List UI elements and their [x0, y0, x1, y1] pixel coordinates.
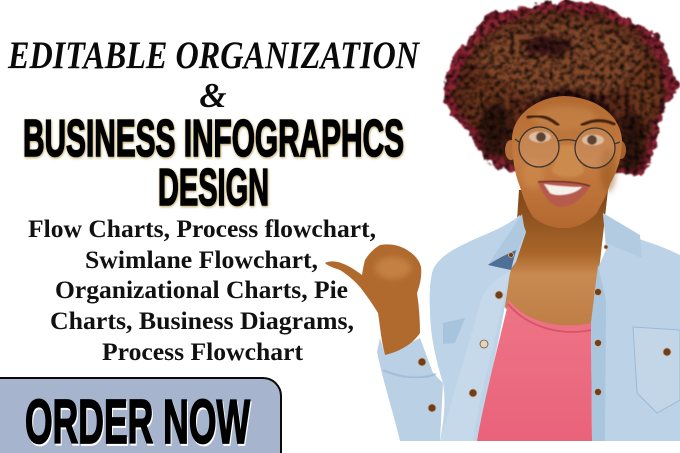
smile	[538, 181, 590, 207]
title: editable organization: EDITABLE ORGANIZATION	[7, 34, 421, 77]
ampersand: &	[199, 76, 227, 115]
denim jacket right panel	[591, 213, 680, 441]
collar right	[603, 213, 642, 258]
hand with thumb out	[325, 244, 421, 355]
cuff buttons	[418, 358, 436, 412]
cuff fold line	[383, 370, 436, 377]
glasses	[515, 127, 620, 168]
heading: design: DESIGN	[158, 159, 269, 217]
jacket buttons	[469, 245, 671, 397]
service list text: Organizational Charts, Pie	[55, 277, 348, 304]
hair	[443, 1, 678, 177]
heading: business infographics: BUSINESS INFOGRAPHCS	[23, 110, 404, 168]
order now button	[0, 378, 281, 453]
face	[512, 96, 622, 228]
cheek light	[522, 161, 544, 189]
service list text	[28, 216, 376, 366]
button label	[25, 388, 251, 453]
service list text: Flow Charts, Process flowchart,	[28, 216, 376, 243]
right chest pocket	[633, 327, 680, 413]
service list text: Process Flowchart	[102, 339, 304, 366]
forehead light	[533, 106, 597, 130]
left chest pocket	[443, 318, 465, 344]
denim jacket left panel	[430, 215, 526, 441]
jacket cuff sleeve	[377, 338, 443, 441]
top neckline	[508, 304, 591, 332]
pink top	[477, 300, 592, 441]
neck and chest	[503, 190, 608, 331]
eyes	[529, 132, 604, 146]
nose	[552, 145, 584, 177]
service list text: Swimlane Flowchart,	[85, 247, 318, 274]
collar left	[488, 214, 525, 265]
right ear	[616, 141, 626, 159]
eyebrows	[528, 116, 614, 125]
jacket placket right	[591, 265, 606, 441]
woman figure	[325, 1, 680, 441]
jacket placket left	[440, 272, 510, 441]
left ear	[505, 140, 517, 160]
cheek shade	[600, 148, 616, 192]
dark inner collar	[488, 250, 516, 270]
service list text: Charts, Business Diagrams,	[50, 308, 354, 335]
